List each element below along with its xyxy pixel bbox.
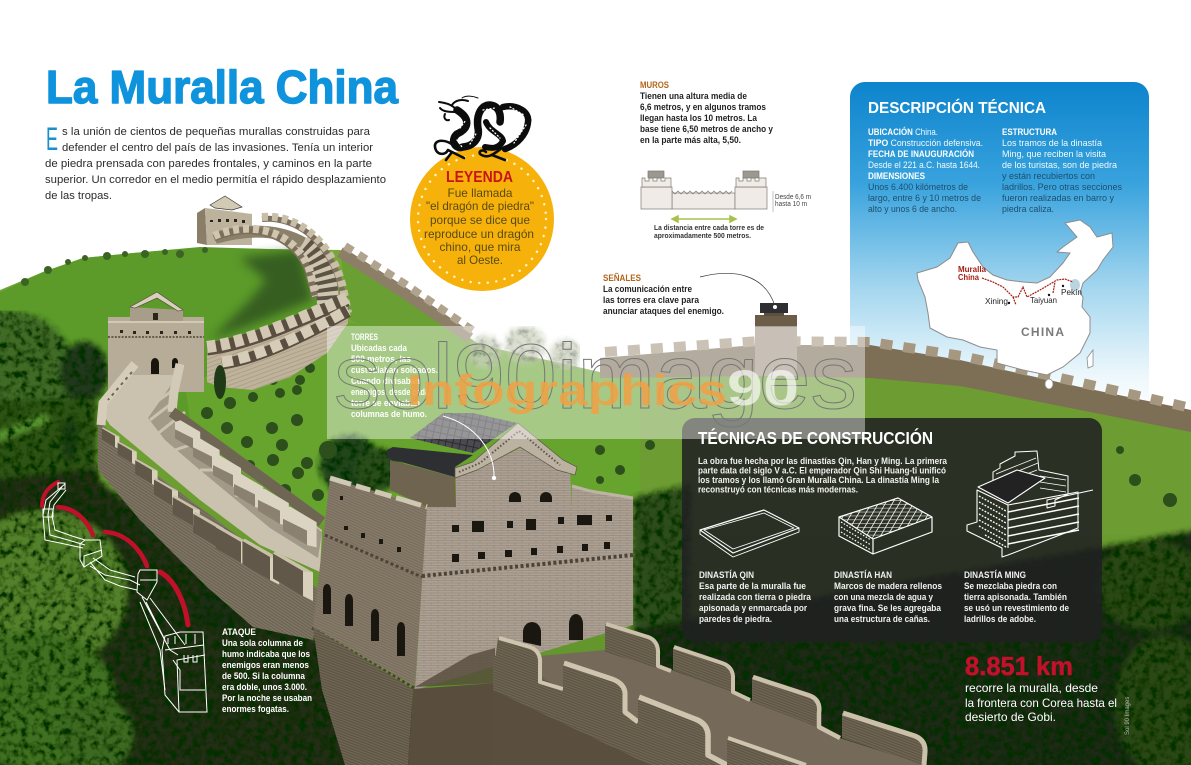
panel: técnicas de construcción [682,418,1102,642]
height marker [772,191,774,212]
column right: y están recubiertos con [1002,171,1095,181]
text: torres: custodiaban soldados. [351,365,438,375]
cornice bands [422,555,633,576]
column left: largo, entre 6 y 10 metros de [868,193,981,203]
grass ground [0,247,1191,765]
text: ataque: enemigos eran menos [222,660,309,670]
map: China [917,220,1113,389]
map labels: Pekín [1061,287,1082,297]
foreground wall [493,624,925,765]
icon: Han block [839,498,932,554]
text: ataque: humo indicaba que los [222,649,310,659]
map labels: CHINA [1021,325,1064,339]
column right: piedra caliza. [1002,204,1054,214]
main wall: upper parapets [101,364,322,522]
text: torres [351,332,438,419]
column right: ESTRUCTURA [1002,127,1057,137]
leyenda badge [410,96,554,291]
text: torres: Cuando divisaban [351,376,420,386]
caption: dinastía Qin: DINASTÍA QIN [699,569,754,580]
caption: dinastía Qin [699,569,812,624]
tower front face [415,487,633,690]
roof [410,413,517,453]
stat: length of the wall: 8.851 km [965,651,1073,681]
text: muros [640,80,774,146]
text: ataque: de 500. Si la columna [222,671,306,681]
text: torres: columnas de humo. [351,409,427,419]
height label [775,194,811,208]
main wall: walkway [100,375,322,572]
badge text: chino, que mira [440,240,521,254]
text: muros: en la parte más alta, 5,50. [640,135,741,146]
red arcs [42,482,188,625]
text: muros: MUROS [640,80,669,91]
caption: dinastía Han: con una mezcla de agua y [834,592,934,602]
text: señales: SEÑALES [603,273,641,284]
map labels: Taiyuan [1030,295,1057,305]
credit text: Sol 90 Images [1125,697,1131,735]
caption: dinastía Ming: se usó un revestimiento de [964,603,1069,613]
shrubs on the lawn [201,363,1177,507]
text: señales: La comunicación entre [603,284,692,295]
column left: Desde el 221 a.C. hasta 1644. [868,160,980,170]
badge text: reproduce un dragón [424,227,534,241]
column left: UBICACIÓN China. [868,126,938,137]
main wall: outer face [98,423,320,640]
distance arrow [672,216,736,222]
height label: hasta 10 m [775,201,807,208]
stat: length of the wall: la frontera con Corea hasta el [965,696,1117,710]
intro text: técnicas [698,456,948,494]
title: La Muralla China [46,61,398,113]
caption: dinastía Qin: Esa parte de la muralla fue [699,581,806,591]
far slope merlons [345,246,475,332]
badge heading: LEYENDA [446,169,513,186]
middle tower [106,292,204,400]
left eave [387,447,473,477]
trees behind wall, far middle [469,326,580,370]
text: descripción técnica [868,98,1122,214]
badge text: "el dragón de piedra" [426,199,534,213]
upper house front gable [456,448,572,507]
text: muros: Tienen una altura media de [640,91,747,102]
caption: dinastía Han: una estructura de cañas. [834,614,930,624]
icon: Qin tray [700,510,799,557]
distance label: La distancia entre cada torre es de [654,223,764,232]
windows and embrasures [323,492,612,656]
lower stretch of curved wall [207,298,348,390]
text: torres: torre se enviaban [351,398,420,408]
column right [1002,127,1122,214]
map labels: Xining [985,296,1008,306]
text: ataque: Una sola columna de [222,638,303,648]
text: señales [603,273,724,317]
text: torres: enemigos, desde cada [351,387,430,397]
intro text: técnicas: parte data del siglo V a.C. El emperador Qin Shi Huang-ti unificó [698,466,946,476]
shadow on tower front [415,648,495,687]
text: ataque: enormes fogatas. [222,704,289,714]
distance label: aproximadamente 500 metros. [654,231,751,240]
upper curved wall with stairs [214,217,348,315]
text: torres: 500 metros, las [351,354,411,364]
badge text: Fue llamada [448,186,513,200]
far slope wall [340,252,470,338]
column right: ladrillos. Pero otras secciones [1002,182,1122,192]
caption: dinastía Han: grava fina. Se les agregaba [834,603,942,613]
top tower [197,196,252,245]
height label: Desde 6,6 m [775,194,811,201]
watermark: infographics: Infographics [407,366,727,415]
tower left face [313,478,427,687]
watermark overlay [327,326,865,439]
stat: length of the wall: recorre la muralla, desde [965,681,1098,695]
text: torres: TORRES [351,332,378,342]
panel: descripción técnica background [850,82,1149,417]
map labels [958,264,1082,339]
text: ataque [222,627,312,714]
text: ataque: ATAQUE [222,627,256,637]
intro paragraph: defender el centro del país de las invasiones. Tenía un interior [62,142,373,154]
watermark: sol90images: sol90images [334,326,857,428]
text: señales: anunciar ataques del enemigo. [603,306,724,317]
intro paragraph: de piedra prensada con paredes frontales, y caminos en la parte [45,158,372,170]
column left: TIPO Construcción defensiva. [868,138,983,148]
caption: dinastía Han: Marcos de madera rellenos [834,581,942,591]
inner parapet merlons [175,420,317,547]
hill crest shrubs [21,247,208,286]
text: torres: Ubicadas cada [351,343,408,353]
text: muros: 6,6 metros, y en algunos tramos [640,102,766,113]
column left: FECHA DE INAUGURACIÓN [868,148,974,159]
intro text: técnicas: La obra fue hecha por las dinastías Qin, Han y Ming. La primera [698,456,948,466]
front merlons [495,638,806,765]
text: muros: llegan hasta los 10 metros. La [640,113,758,124]
white line towers and wall [43,483,207,712]
callout curve: señales [700,273,777,309]
intro paragraph: de las tropas. [45,190,112,202]
hill shadow inside the curve [210,250,312,340]
badge text: al Oeste. [457,253,503,267]
caption: dinastía Ming: tierra apisonada. También [964,592,1067,602]
tower merlon caps [330,478,427,507]
stat: length of the wall: desierto de Gobi. [965,710,1056,724]
caption: dinastía Qin: realizada con tierra o piedra [699,592,812,602]
map labels: Muralla [958,264,986,274]
stat: length of the wall [965,651,1117,724]
intro paragraph: superior. Un corredor en el medio permitía el rápido desplazamiento [45,174,386,186]
column right: fueron realizadas en barro y [1002,193,1114,203]
diagram towers and wall [641,171,767,209]
heading: técnicas: TÉCNICAS DE CONSTRUCCIÓN [698,427,933,448]
badge text: porque se dice que [430,213,530,227]
intro text: técnicas: reconstruyó con técnicas más modernas. [698,484,858,494]
callout curve: torres [443,416,496,480]
tower base [313,627,413,765]
intro text: técnicas: los tramos y los llamó Gran Muralla China. La dinastía Ming la [698,475,940,485]
main tower [312,413,633,765]
caption: dinastía Ming: Se mezclaba piedra con [964,581,1057,591]
signal tower, far [755,303,797,376]
upper house left wall [390,460,456,507]
lower face [493,655,727,765]
intro paragraph [45,121,386,202]
Bohai sea [1070,279,1080,291]
intro paragraph: s la unión de cientos de pequeñas murallas construidas para [62,126,371,138]
column left: DIMENSIONES [868,171,925,181]
text: señales: las torres era clave para [603,295,700,306]
caption: dinastía Han: DINASTÍA HAN [834,569,892,580]
Hainan and Taiwan [1045,350,1093,389]
caption: dinastía Ming: DINASTÍA MING [964,569,1026,580]
column right: Ming, que reciben la visita [1002,149,1107,159]
text: ataque: Por la noche se usaban [222,693,312,703]
icon: Ming wall layers [967,451,1093,557]
distance label [654,223,764,240]
dark tree by the tower [214,365,226,399]
column left: alto y unos 6 de ancho. [868,204,957,214]
icon: dragon [435,96,528,160]
column right: Los tramos de la dinastía [1002,138,1103,148]
text: ataque: era doble, unos 3.000. [222,682,307,692]
badge text [424,186,534,267]
attack diagram: smoke signal relay [42,482,207,712]
walkway and parapet body [495,650,925,765]
diagram: wall dimensions [641,171,811,240]
wall route on map [982,278,1073,305]
gable eave [455,423,577,478]
back merlons [605,624,925,765]
outer parapet merlons [102,427,313,601]
dotted ring [418,155,546,283]
foliage: forest areas [0,311,1191,765]
caption: dinastía Qin: apisonada y enmarcada por [699,603,807,613]
column left [868,126,983,214]
map outline [917,220,1113,375]
column right: de los turistas, son de piedra [1002,160,1118,170]
map labels: China [958,272,979,282]
column left: Unos 6.400 kilómetros de [868,182,968,192]
landscape scene with the wall [0,196,1191,765]
far wall on the right [600,341,1191,432]
caption: dinastía Han [834,569,942,624]
caption: dinastía Qin: paredes de piedra. [699,614,772,624]
intro paragraph: E [46,121,58,157]
text: muros: base tiene 6,50 metros de ancho y [640,124,774,135]
watermark: 90: 90 [727,360,799,416]
caption: dinastía Ming [964,569,1069,624]
heading: descripción: DESCRIPCIÓN TÉCNICA [868,98,1046,117]
badge circle [410,147,554,291]
city dots [1008,285,1064,304]
caption: dinastía Ming: ladrillos de adobe. [964,614,1036,624]
